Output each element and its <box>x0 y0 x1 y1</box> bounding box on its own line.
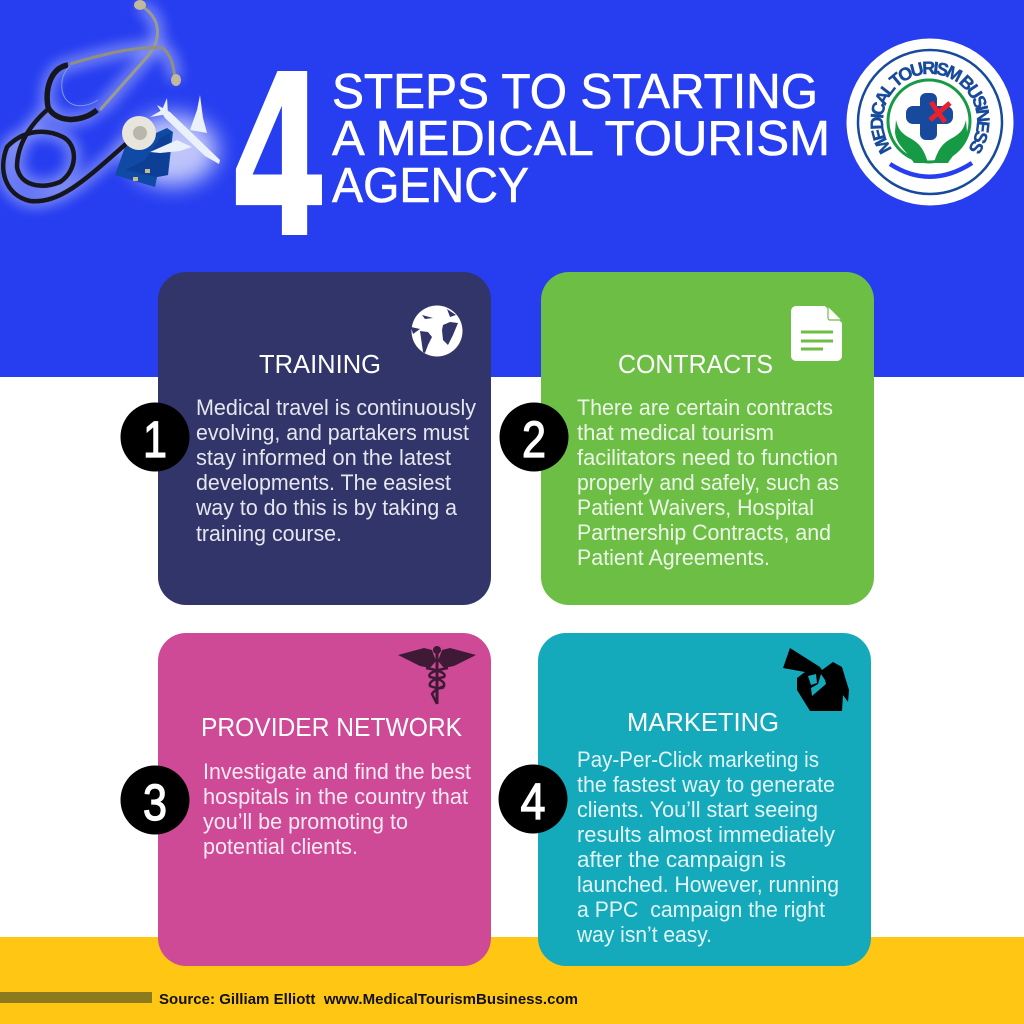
number badge 2: 2 <box>522 411 546 468</box>
title: AGENCY <box>332 159 529 213</box>
body text: There are certain contracts <box>577 395 833 420</box>
number badge 1 <box>120 402 190 472</box>
logo: Medical Tourism Business: MEDICAL TOURISM BUSINESS <box>870 61 990 155</box>
icon: document <box>791 306 842 361</box>
body text <box>576 747 839 947</box>
body text: a PPC campaign the right <box>577 897 825 922</box>
body text: stay informed on the latest <box>196 445 451 470</box>
body text: potential clients. <box>203 834 358 859</box>
number badge 3: 3 <box>143 774 167 831</box>
number badge 4: 4 <box>520 773 546 830</box>
logo hands <box>895 120 967 163</box>
source line: Source: Gilliam Elliott www.MedicalTourismBusiness.com <box>159 991 578 1008</box>
body text <box>195 395 476 546</box>
body text: Investigate and find the best <box>203 759 471 784</box>
body text: clients. You’ll start seeing <box>577 797 818 822</box>
logo cross <box>906 93 953 140</box>
chest piece <box>122 116 156 150</box>
icon: person with megaphone <box>783 648 849 711</box>
body text: hospitals in the country that <box>203 784 468 809</box>
heading: MARKETING <box>627 707 779 737</box>
body text: launched. However, running <box>577 872 839 897</box>
title: A MEDICAL TOURISM <box>332 112 830 166</box>
body text: evolving, and partakers must <box>196 420 469 445</box>
footer accent bar <box>0 992 152 1003</box>
heading: TRAINING <box>259 349 381 379</box>
yellow footer band <box>0 937 1024 1024</box>
body text: Patient Agreements. <box>577 545 770 570</box>
big numeral 4: 4 <box>230 27 328 289</box>
body text: Medical travel is continuously <box>196 395 476 420</box>
number badge 4 <box>498 764 568 834</box>
body text: that medical tourism <box>577 420 774 445</box>
number badge 2 <box>500 402 568 472</box>
number badge 3 <box>120 766 190 834</box>
heading: CONTRACTS <box>618 349 773 379</box>
panel: training <box>158 272 491 605</box>
icon: globe <box>411 306 462 356</box>
body text <box>203 759 471 859</box>
body text: the fastest way to generate <box>577 772 835 797</box>
title: STEPS TO STARTING <box>332 65 818 119</box>
body text: results almost immediately <box>577 822 835 847</box>
plane <box>150 95 220 164</box>
blue header band <box>0 0 1024 377</box>
body text: Patient Waivers, Hospital <box>577 495 814 520</box>
body text: after the campaign is <box>577 847 786 872</box>
body text: way isn’t easy. <box>576 922 712 947</box>
logo: Medical Tourism Business <box>846 38 1014 206</box>
passports <box>115 128 173 187</box>
body text: facilitators need to function <box>577 445 838 470</box>
number badge 1: 1 <box>143 411 167 468</box>
body text: properly and safely, such as <box>577 470 839 495</box>
body text: Partnership Contracts, and <box>577 520 831 545</box>
panel: marketing <box>538 633 871 966</box>
body text: developments. The easiest <box>196 470 451 495</box>
body text: training course. <box>196 521 342 546</box>
panel: provider network <box>158 633 491 966</box>
icon: caduceus <box>398 646 476 704</box>
body text <box>577 395 839 570</box>
body text: you’ll be promoting to <box>203 809 408 834</box>
title <box>332 65 830 213</box>
heading: PROVIDER NETWORK <box>201 712 463 742</box>
stethoscope tubes <box>100 5 157 110</box>
body text: Pay-Per-Click marketing is <box>577 747 819 772</box>
panel: contracts <box>541 272 874 605</box>
illustration: stethoscope, passports and plane <box>3 0 220 201</box>
body text: way to do this is by taking a <box>195 495 458 520</box>
